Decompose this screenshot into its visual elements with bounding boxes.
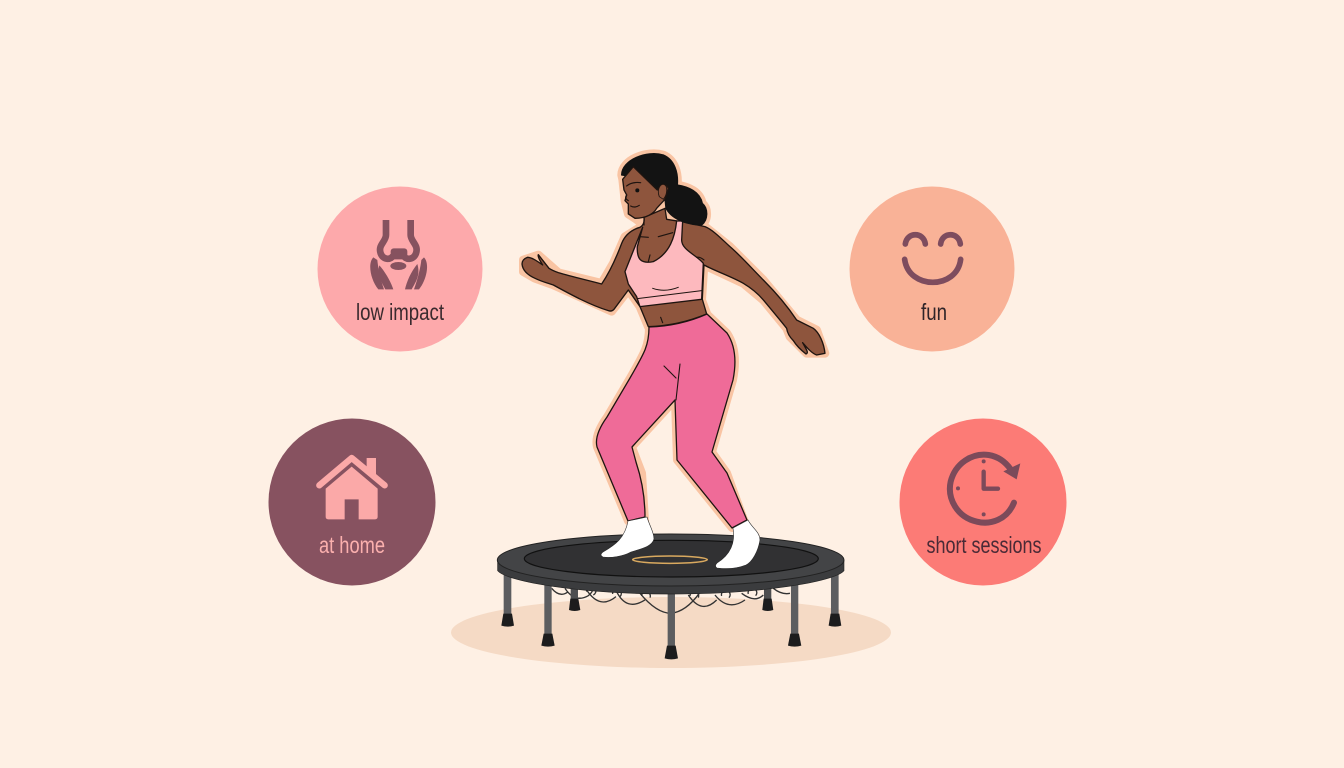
badge: low impact bbox=[318, 186, 482, 352]
sports bra bbox=[625, 221, 703, 307]
label: low impact bbox=[356, 299, 444, 325]
ear bbox=[658, 184, 667, 199]
face details bbox=[626, 182, 704, 323]
icon: smile bbox=[905, 235, 961, 282]
peach halo bbox=[523, 154, 825, 528]
label: fun bbox=[921, 299, 947, 325]
springs bbox=[552, 586, 790, 613]
badge: fun bbox=[850, 186, 1014, 352]
frame side band bbox=[498, 560, 844, 594]
floor shadow bbox=[451, 597, 891, 668]
legs bbox=[504, 573, 839, 647]
badge: at home bbox=[268, 418, 436, 586]
leggings seams bbox=[664, 364, 680, 400]
label: short sessions bbox=[926, 532, 1042, 558]
leggings bbox=[596, 314, 747, 528]
figure: woman bouncing bbox=[522, 154, 825, 569]
circle bbox=[318, 186, 482, 352]
label: at home bbox=[319, 532, 385, 558]
left sock bbox=[601, 517, 654, 557]
right sock bbox=[716, 520, 760, 569]
bra detail bbox=[637, 287, 702, 299]
circle bbox=[268, 418, 436, 586]
face bbox=[623, 167, 668, 218]
circle bbox=[900, 418, 1066, 586]
icon: knee joint bbox=[370, 220, 427, 289]
badge: short sessions bbox=[900, 418, 1066, 586]
eye bbox=[635, 188, 639, 192]
rubber feet bbox=[501, 599, 841, 659]
hair bbox=[622, 154, 707, 225]
frame top bbox=[497, 534, 844, 586]
body and arms bbox=[522, 208, 825, 355]
icon: house bbox=[319, 458, 385, 519]
mat bbox=[524, 540, 818, 577]
gold ring bbox=[633, 556, 707, 563]
icon: clock with arrow bbox=[950, 455, 1020, 523]
circle bbox=[850, 186, 1014, 352]
trampoline bbox=[497, 534, 844, 659]
